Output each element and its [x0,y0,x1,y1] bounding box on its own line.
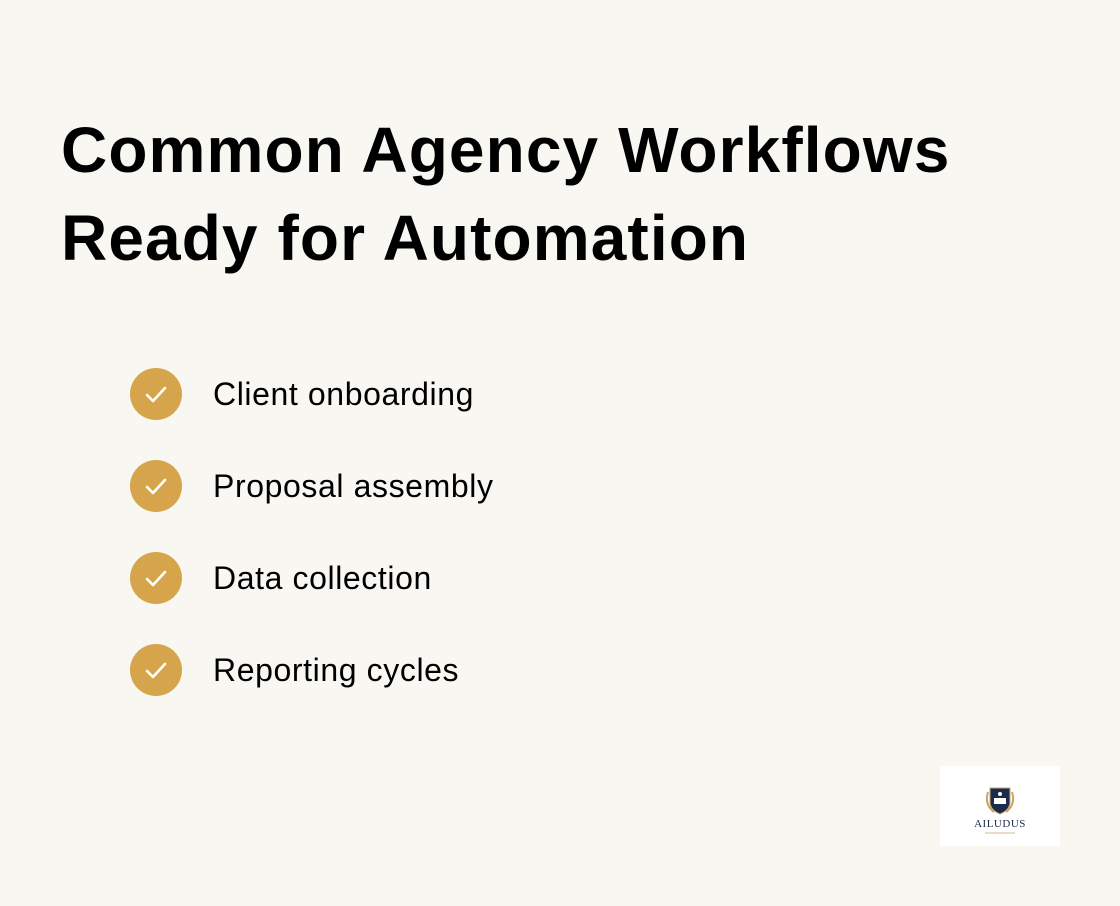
label: Reporting cycles [213,652,459,688]
title: Common Agency Workflows [61,114,950,186]
title [61,114,950,274]
icon: check [130,460,182,512]
item: data collection [130,552,432,604]
logo: AILUDUS [974,818,1026,830]
icon: check [130,552,182,604]
icon: check [130,368,182,420]
item: client onboarding [130,368,474,420]
item: proposal assembly [130,460,494,512]
label: Proposal assembly [213,468,494,504]
logo [940,766,1060,846]
title: Ready for Automation [61,202,749,274]
icon: check [130,644,182,696]
label: Data collection [213,560,432,596]
label: Client onboarding [213,376,474,412]
item: reporting cycles [130,644,459,696]
